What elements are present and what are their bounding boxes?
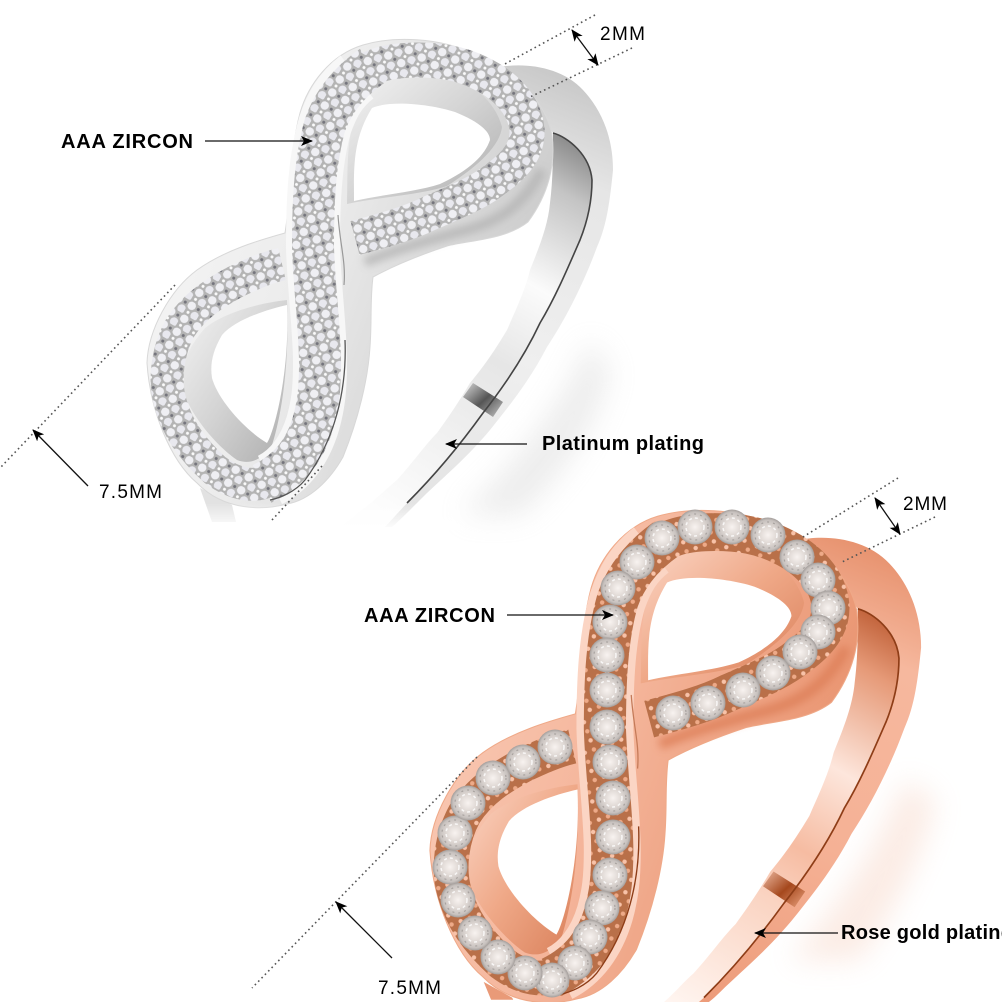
arrow: 2MM — [875, 498, 900, 534]
label: AAA ZIRCON: AAA ZIRCON — [61, 131, 193, 153]
shank edge line — [704, 609, 899, 998]
crossover metal strip — [560, 550, 651, 973]
ring shank outer band — [372, 65, 613, 527]
label: 7.5MM: 7.5MM — [378, 978, 441, 999]
setting: right arm and top of loop — [649, 532, 831, 719]
upper loop bevel — [641, 546, 804, 683]
crossover edge line — [631, 695, 638, 769]
label: Platinum plating: Platinum plating — [542, 433, 704, 455]
ring shank outer band — [667, 538, 921, 1002]
label: 2MM: 2MM — [600, 24, 645, 45]
lower loop bevel — [182, 300, 288, 462]
zircon stones — [432, 510, 846, 998]
lower loop bevel — [467, 784, 578, 954]
shank reflection — [463, 383, 503, 417]
arrow: AAA ZIRCON — [507, 614, 613, 616]
setting: central diagonal — [551, 538, 667, 978]
rose gold ring — [430, 510, 935, 1002]
arrow: Platinum plating — [446, 443, 527, 445]
ring metal group — [430, 510, 921, 1002]
infinity metal body — [147, 39, 553, 508]
dotted dimension guides: width — [803, 478, 935, 563]
rose gold annotations — [252, 478, 1002, 999]
ring shadow — [460, 340, 610, 515]
ring shadow — [790, 780, 935, 960]
arm shading — [365, 170, 542, 262]
upper loop opening — [648, 578, 791, 680]
crossover edge line — [338, 215, 344, 285]
dotted dimension guide: length — [252, 757, 477, 988]
back of shank — [200, 488, 236, 522]
upper loop opening — [354, 104, 490, 201]
stone band: right arm and top of loop — [355, 60, 527, 238]
silver annotations — [0, 15, 704, 520]
label: AAA ZIRCON: AAA ZIRCON — [364, 605, 495, 627]
ring shank inner surface — [340, 133, 592, 527]
arrow: Rose gold plating — [755, 932, 838, 934]
crossover metal strip — [270, 77, 357, 480]
stone band: lower left arm — [167, 264, 282, 484]
lower loop opening — [211, 305, 287, 443]
arm shading — [660, 648, 846, 744]
back of shank — [484, 982, 513, 1000]
dotted dimension guides: width — [503, 15, 632, 97]
arrow: 7.5MM — [336, 902, 392, 958]
upper loop bevel — [347, 74, 502, 204]
ring shank inner surface — [644, 609, 899, 1002]
bottom fade — [190, 503, 460, 530]
lower loop opening — [498, 790, 578, 935]
label: 2MM: 2MM — [903, 494, 947, 515]
dotted dimension guides: length — [0, 285, 322, 520]
label: 7.5MM: 7.5MM — [99, 482, 162, 503]
body edge line — [560, 826, 639, 994]
arrow: 2MM — [572, 30, 598, 65]
body edge line — [270, 340, 345, 500]
silver ring — [147, 39, 613, 530]
shank edge line — [407, 133, 592, 503]
stone band: central diagonal — [262, 66, 372, 484]
arrow: 7.5MM — [33, 430, 88, 486]
shank reflection — [763, 872, 805, 907]
setting: lower left arm — [451, 746, 572, 978]
arrow: AAA ZIRCON — [205, 140, 312, 142]
infinity metal body — [430, 510, 858, 1002]
